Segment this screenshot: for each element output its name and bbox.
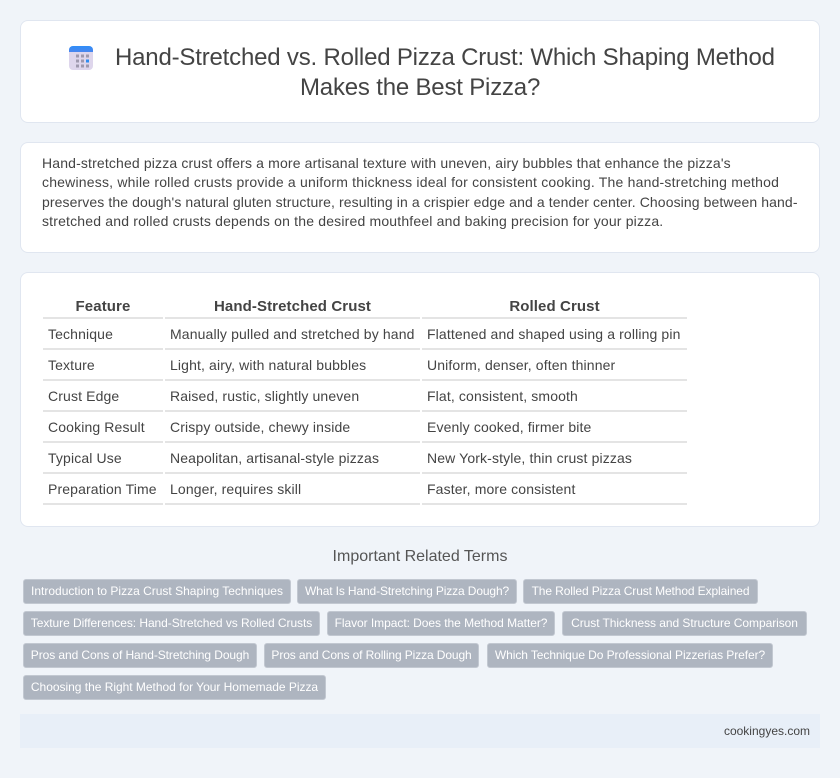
- related term tags: Pros and Cons of Hand-Stretching Dough: [31, 648, 249, 662]
- related term tags: Choosing the Right Method for Your Homemade Pizza: [31, 680, 318, 694]
- related term tags: What Is Hand-Stretching Pizza Dough?: [305, 584, 509, 598]
- comparison table: Preparation Time: [48, 481, 157, 497]
- comparison table: Crust Edge: [48, 388, 119, 404]
- comparison table: Hand-Stretched Crust: [214, 298, 371, 315]
- comparison table: [43, 298, 687, 505]
- comparison table: Neapolitan, artisanal-style pizzas: [170, 450, 379, 466]
- comparison table: Longer, requires skill: [170, 481, 301, 497]
- comparison table: Rolled Crust: [509, 298, 600, 315]
- related term tags: Crust Thickness and Structure Comparison: [571, 616, 798, 630]
- comparison table: Faster, more consistent: [427, 481, 576, 497]
- panel: comparison table card: [20, 272, 820, 527]
- comparison table: Flat, consistent, smooth: [427, 388, 578, 404]
- summary text: [42, 154, 798, 229]
- related term tags: Texture Differences: Hand-Stretched vs Rolled Crusts: [31, 616, 312, 630]
- comparison table: New York-style, thin crust pizzas: [427, 450, 632, 466]
- related term tags: Introduction to Pizza Crust Shaping Techniques: [31, 584, 283, 598]
- related term tags: [23, 579, 807, 700]
- title: [115, 44, 775, 101]
- related term tags: Pros and Cons of Rolling Pizza Dough: [271, 648, 472, 662]
- panel: title card: [20, 20, 820, 123]
- comparison table: Flattened and shaped using a rolling pin: [427, 326, 680, 342]
- comparison table: Cooking Result: [48, 419, 145, 435]
- related term tags: The Rolled Pizza Crust Method Explained: [532, 584, 749, 598]
- title: Hand-Stretched vs. Rolled Pizza Crust: Which Shaping Method: [115, 44, 775, 71]
- summary text: chewiness, while rolled crusts provide a uniform thickness ideal for consistent cooking. The hand-stretching method: [42, 174, 779, 190]
- comparison table: Light, airy, with natural bubbles: [170, 357, 366, 373]
- comparison table: Typical Use: [48, 450, 122, 466]
- comparison table: Evenly cooked, firmer bite: [427, 419, 591, 435]
- comparison table: Raised, rustic, slightly uneven: [170, 388, 359, 404]
- comparison table: Technique: [48, 326, 113, 342]
- heading: related terms: Important Related Terms: [333, 548, 507, 565]
- related term tags: Which Technique Do Professional Pizzerias Prefer?: [495, 648, 765, 662]
- related term tags: Flavor Impact: Does the Method Matter?: [335, 616, 547, 630]
- title: Makes the Best Pizza?: [300, 74, 540, 101]
- comparison table: Texture: [48, 357, 95, 373]
- summary text: stretched and rolled crusts depends on the desired mouthfeel and baking precision for your pizza.: [42, 213, 663, 229]
- comparison table: Manually pulled and stretched by hand: [170, 326, 415, 342]
- footer bar: [20, 714, 820, 748]
- panel: summary card: [20, 142, 820, 253]
- summary text: Hand-stretched pizza crust offers a more artisanal texture with uneven, airy bubbles that enhance the pizza's: [42, 154, 731, 170]
- comparison table: Uniform, denser, often thinner: [427, 357, 615, 373]
- comparison table: Crispy outside, chewy inside: [170, 419, 350, 435]
- summary text: preserves the dough's natural gluten structure, resulting in a crispier edge and a tender center. Choosing between hand-: [42, 194, 798, 210]
- comparison table: Feature: [76, 298, 130, 315]
- footer credit: cookingyes.com: [724, 724, 810, 738]
- icon: calendar grid: [69, 46, 93, 70]
